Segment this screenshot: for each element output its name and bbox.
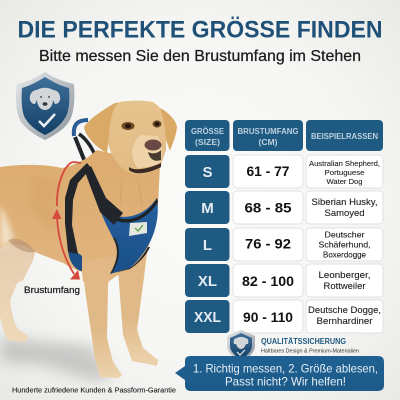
row S: S <box>202 164 213 181</box>
row M: Samoyed <box>324 208 364 218</box>
row XL: Rottweiler <box>324 281 366 291</box>
row XL: 82 - 100 <box>242 273 294 289</box>
table header: (SIZE) <box>195 138 220 147</box>
dog harness <box>65 163 158 274</box>
dog far front leg <box>118 245 158 366</box>
dog body and rear leg <box>0 150 160 342</box>
row L: Boxerdogge <box>323 250 367 260</box>
row XXL: Bernhardiner <box>316 316 373 326</box>
footer note: Hunderte zufriedene Kunden & Passform-Garantie <box>12 386 176 394</box>
row M: M <box>201 200 214 217</box>
quality assurance text: QUALITÄTSSICHERUNG <box>261 337 346 346</box>
illustration: dog wearing harness <box>0 101 177 378</box>
quality assurance text: Haltbares Design & Premium-Materialien <box>261 348 359 354</box>
row S: Australian Shepherd, <box>309 159 380 168</box>
subtitle: Bitte messen Sie den Brustumfang im Stehen <box>39 48 361 65</box>
row M: Siberian Husky, <box>312 197 378 207</box>
measuring arrow <box>52 162 81 280</box>
callout: help steps: 1. Richtig messen, 2. Größe ablesen, <box>193 362 378 376</box>
row M: 68 - 85 <box>244 200 292 216</box>
row XL <box>185 264 383 297</box>
dog head <box>84 101 177 205</box>
row M <box>185 191 383 224</box>
dog handle <box>74 120 95 162</box>
row S <box>185 155 383 188</box>
dog back shading <box>30 175 60 235</box>
dog belly highlight <box>0 205 14 248</box>
dog rear leg tone <box>0 244 35 342</box>
row XL: XL <box>198 273 217 290</box>
table header: GRÖSSE <box>191 127 224 136</box>
size table <box>185 120 383 333</box>
label: Brustumfang: Brustumfang <box>24 285 80 296</box>
dog near front leg <box>82 256 122 378</box>
title: DIE PERFEKTE GRÖSSE FINDEN <box>18 16 382 44</box>
table header: BRUSTUMFANG <box>238 127 298 136</box>
row L: L <box>203 237 212 254</box>
row XXL: XXL <box>194 309 221 326</box>
icon: quality shield <box>227 330 255 362</box>
row XXL <box>185 300 383 333</box>
table header: BEISPIELRASSEN <box>311 132 378 141</box>
icon: dog shield badge <box>16 72 74 140</box>
dog groin fold <box>8 239 35 252</box>
row XXL: 90 - 110 <box>243 309 293 325</box>
callout: help steps <box>175 356 384 391</box>
row L: Schäferhund, <box>318 240 370 250</box>
ground shadow <box>0 338 115 382</box>
table header <box>185 120 383 151</box>
row S: Portuguese <box>324 168 364 177</box>
row L: Deutscher <box>324 230 365 240</box>
callout: help steps: Passt nicht? Wir helfen! <box>225 374 346 388</box>
quality assurance text <box>261 337 359 354</box>
row XXL: Deutsche Dogge, <box>308 305 381 315</box>
table header: (CM) <box>258 138 278 147</box>
row XL: Leonberger, <box>318 270 370 280</box>
row S: 61 - 77 <box>246 163 290 179</box>
row L <box>185 228 383 261</box>
row L: 76 - 92 <box>245 236 291 252</box>
row S: Water Dog <box>326 177 362 186</box>
